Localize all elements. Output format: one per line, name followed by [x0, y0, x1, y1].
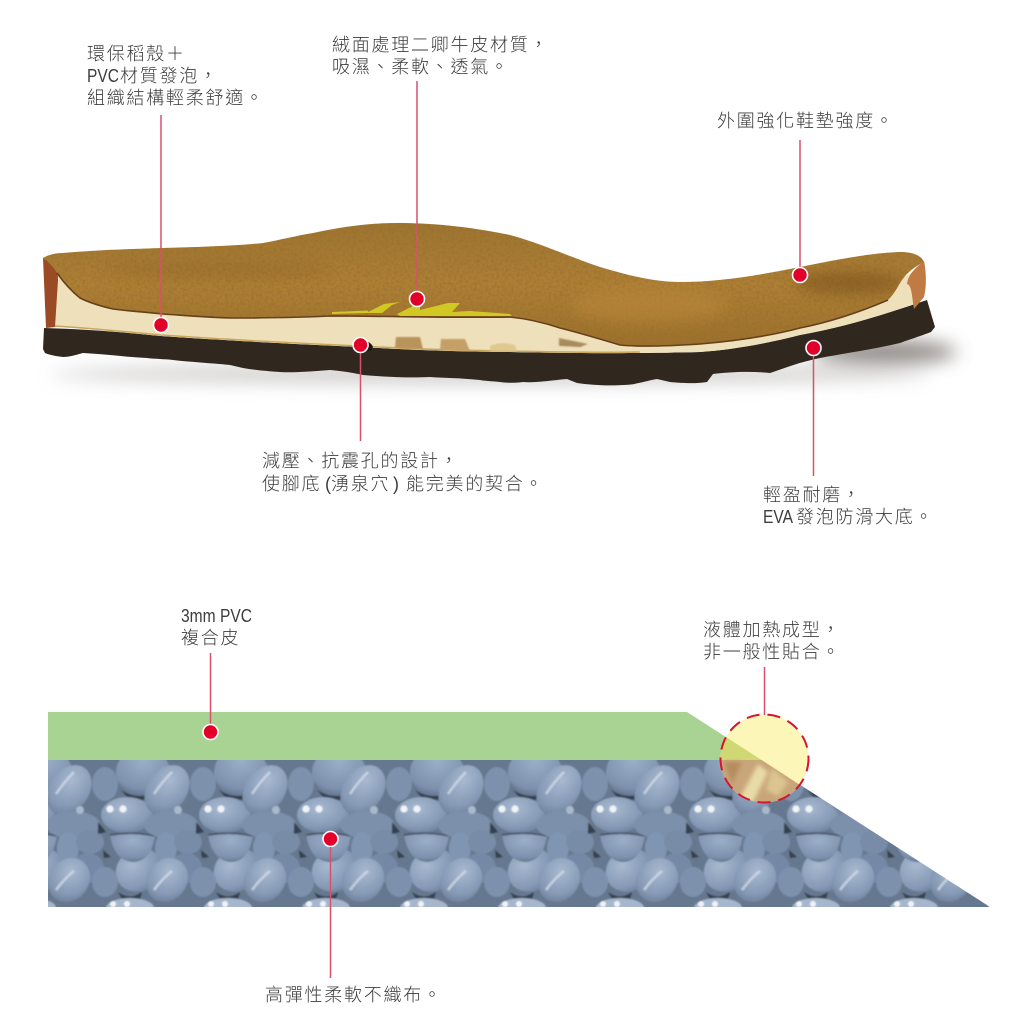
callout: rice husk PVC foam: PVC: [87, 66, 119, 86]
cushion holes: [352, 337, 588, 351]
callout: liquid heat forming: 液體加熱成型，: [703, 620, 841, 640]
callout: suede leather: 吸濕、柔軟、透氣。: [332, 57, 510, 77]
callout: suede leather: 絨面處理二卿牛皮材質，: [332, 35, 549, 55]
callout: 3mm PVC: 複合皮: [181, 628, 240, 648]
callout: suede leather: [332, 35, 549, 306]
callout: EVA outsole: [763, 340, 934, 527]
callout: liquid heat forming: 非一般性貼合。: [703, 642, 841, 662]
callout: 3mm PVC: 3mm PVC: [181, 606, 252, 626]
toe cork edge: [907, 261, 926, 309]
heel edge: [43, 257, 58, 328]
callout: non-woven fabric: 高彈性柔軟不織布。: [265, 985, 443, 1005]
magnified joint: [720, 714, 810, 804]
callout: non-woven fabric: [265, 832, 443, 1005]
outsole: [43, 300, 935, 385]
suede shading: [176, 268, 902, 322]
callout: liquid heat forming: [703, 620, 841, 715]
callout: EVA outsole: 輕盈耐磨，: [763, 485, 862, 505]
yellow logo: [332, 302, 512, 316]
callout: reinforced perimeter: 外圍強化鞋墊強度。: [717, 111, 895, 131]
ground shadow: [50, 340, 957, 383]
callout: reinforced perimeter: [717, 111, 895, 282]
bubble foam layer: [48, 760, 990, 907]
callout: rice husk PVC foam: 材質發泡，: [120, 66, 219, 86]
callout: shock absorbing holes: 使腳底: [262, 474, 321, 494]
callout: 3mm PVC: [181, 606, 252, 740]
callout: EVA outsole: 發泡防滑大底。: [796, 507, 934, 527]
suede stitched edge: [57, 273, 888, 346]
insole cross-section: [43, 223, 957, 385]
foam gold lower edge: [55, 326, 640, 352]
callout: shock absorbing holes: (: [325, 474, 331, 494]
foam midsole: [54, 265, 917, 353]
callout: shock absorbing holes: ): [393, 474, 399, 494]
callout: EVA outsole: EVA: [763, 507, 793, 527]
callout: shock absorbing holes: [262, 338, 544, 494]
green PVC layer: [48, 712, 762, 760]
callout: shock absorbing holes: 湧泉穴: [331, 474, 390, 494]
callout: shock absorbing holes: 能完美的契合。: [406, 474, 544, 494]
suede upper: [43, 223, 924, 346]
callout: rice husk PVC foam: [87, 44, 265, 332]
callout: shock absorbing holes: 減壓、抗震孔的設計，: [262, 451, 460, 471]
callout: rice husk PVC foam: 環保稻殼＋: [87, 44, 186, 64]
callout: rice husk PVC foam: 組織結構輕柔舒適。: [87, 88, 265, 108]
